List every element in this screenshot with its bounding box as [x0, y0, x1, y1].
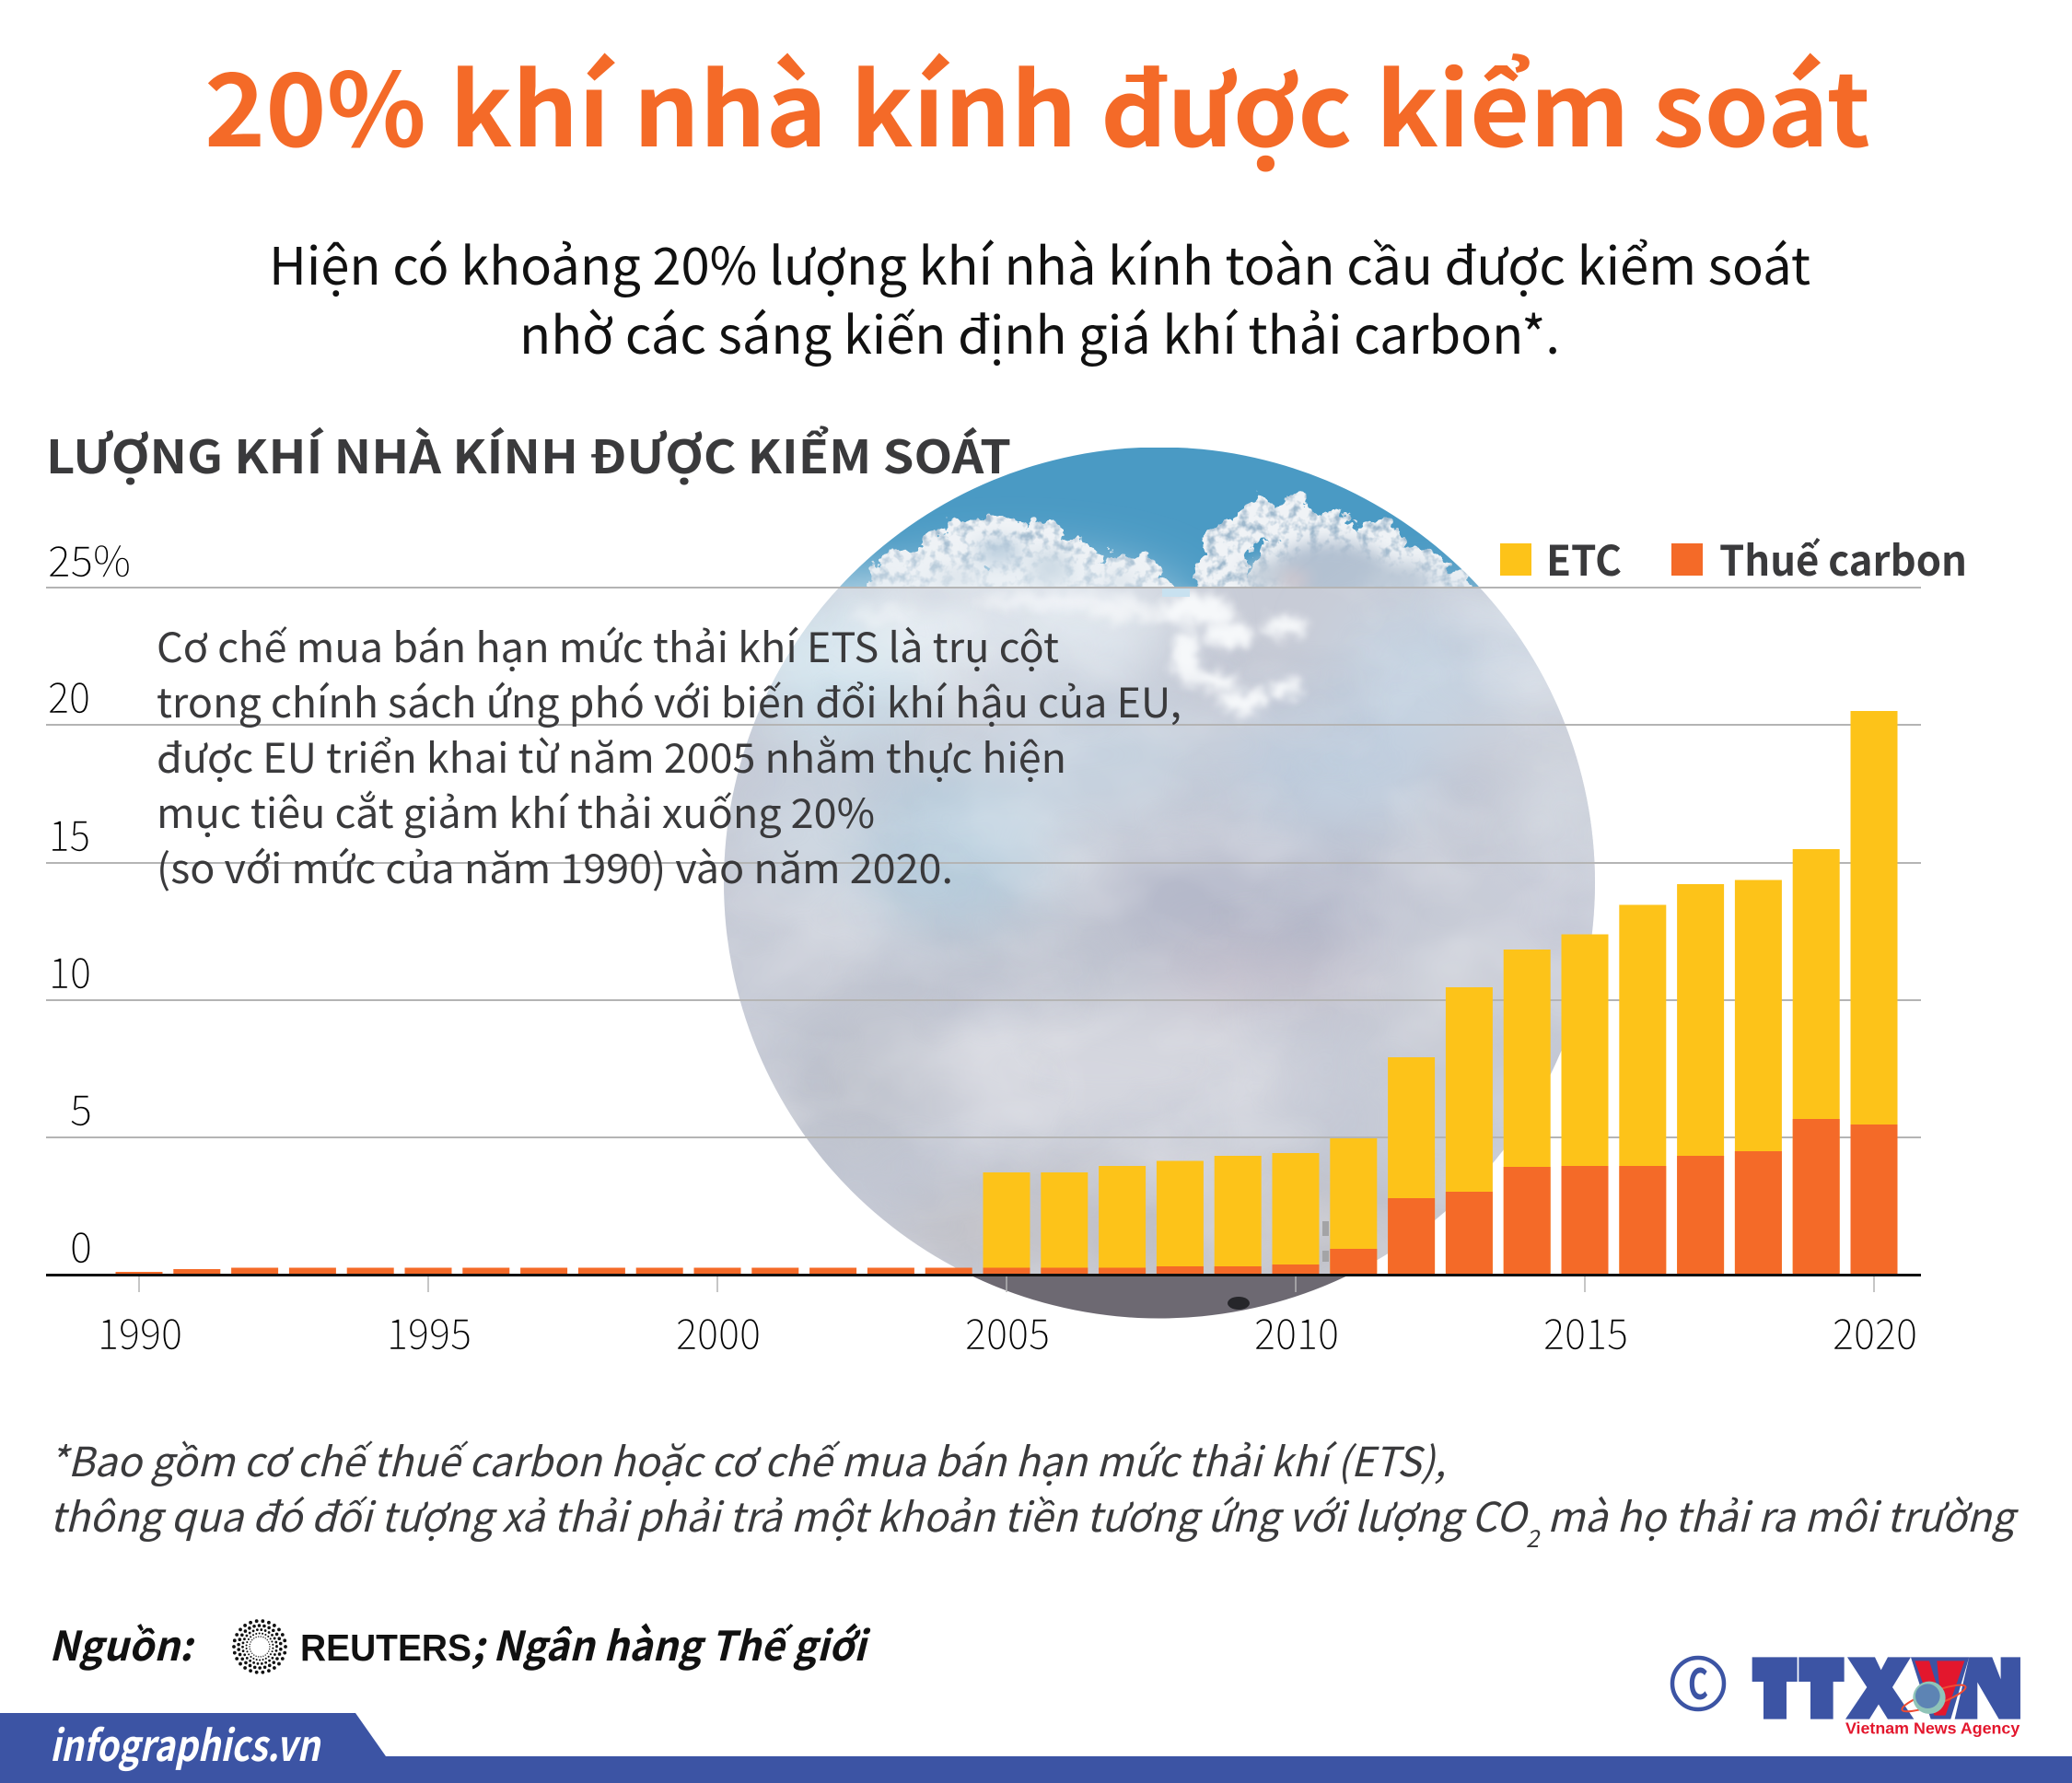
legend: Thuế carbon — [1719, 528, 1967, 588]
y axis labels: 10 — [49, 940, 91, 1001]
footnote: mà họ thải ra môi trường — [1547, 1485, 2019, 1544]
legend: ETC — [1546, 528, 1622, 588]
y axis labels: 15 — [49, 803, 90, 864]
footnote — [49, 1429, 2019, 1555]
source line — [49, 1614, 871, 1672]
logo: TTXVN Vietnam News Agency: Vietnam News Agency — [1845, 1719, 2020, 1738]
subtitle text block: nhờ các sáng kiến định giá khí thải carbon*. — [519, 295, 1560, 369]
source line: Ngân hàng Thế giới — [493, 1614, 871, 1672]
legend — [1500, 528, 1967, 588]
x axis labels: 2010 — [1254, 1301, 1339, 1362]
photo: lower smoke mass under overlay — [724, 571, 1607, 1280]
icon: Reuters dotted logo — [234, 1621, 285, 1672]
footnote: 2 — [1526, 1521, 1541, 1555]
gridlines — [46, 588, 1921, 1292]
subtitle text block: Hiện có khoảng 20% lượng khí nhà kính toàn cầu được kiểm soát — [269, 226, 1810, 300]
x axis labels — [98, 1301, 1917, 1362]
photo: dark base below axis — [972, 1276, 1346, 1319]
annotation text block: mục tiêu cắt giảm khí thải xuống 20% — [157, 781, 875, 840]
photo: tree-top speckles — [1322, 1221, 1329, 1262]
heading: chart title: LƯỢNG KHÍ NHÀ KÍNH ĐƯỢC KIỂM SOÁT — [46, 421, 1011, 487]
series: Thuế carbon — [116, 1119, 1897, 1274]
annotation text block: Cơ chế mua bán hạn mức thải khí ETS là trụ cột — [157, 615, 1059, 674]
x axis labels: 2015 — [1543, 1301, 1628, 1362]
x axis labels: 1995 — [387, 1301, 471, 1362]
photo: clouds in circle — [724, 448, 1607, 1330]
x axis labels: 2000 — [676, 1301, 761, 1362]
series: ETC — [984, 711, 1897, 1273]
y axis labels — [48, 529, 131, 1276]
source line: ; — [471, 1614, 487, 1672]
subtitle text block — [269, 226, 1810, 369]
x axis labels: 2020 — [1833, 1301, 1917, 1362]
footnote: *Bao gồm cơ chế thuế carbon hoặc cơ chế mua bán hạn mức thải khí (ETS), — [49, 1429, 1446, 1488]
title: 20% khí nhà kính được kiểm soát — [204, 29, 1870, 176]
icon: copyright symbol — [1672, 1651, 1724, 1712]
stacked bar chart — [116, 711, 1897, 1274]
x axis labels: 2005 — [965, 1301, 1050, 1362]
footer banner: infographics.vn — [50, 1713, 321, 1774]
annotation text block: được EU triển khai từ năm 2005 nhằm thực hiện — [157, 726, 1066, 785]
x axis baseline — [46, 1274, 1921, 1276]
y axis labels: 5 — [70, 1078, 92, 1138]
annotation text block: (so với mức của năm 1990) vào năm 2020. — [157, 836, 953, 895]
x axis labels: 1990 — [98, 1301, 182, 1362]
source line: Nguồn: — [49, 1614, 195, 1672]
y axis labels: 20 — [48, 665, 90, 726]
y axis labels: 0 — [70, 1215, 92, 1276]
icon: copyright symbol: C — [1688, 1651, 1708, 1712]
logo: TTXVN Vietnam News Agency — [1752, 1657, 2020, 1738]
annotation text block: trong chính sách ứng phó với biến đổi khí hậu của EU, — [157, 670, 1182, 729]
footnote: thông qua đó đối tượng xả thải phải trả một khoản tiền tương ứng với lượng CO — [50, 1485, 1530, 1544]
y axis labels: 25% — [48, 529, 131, 589]
footer banner — [0, 1713, 2072, 1783]
annotation text block — [157, 615, 1182, 895]
source line: REUTERS — [300, 1626, 471, 1669]
